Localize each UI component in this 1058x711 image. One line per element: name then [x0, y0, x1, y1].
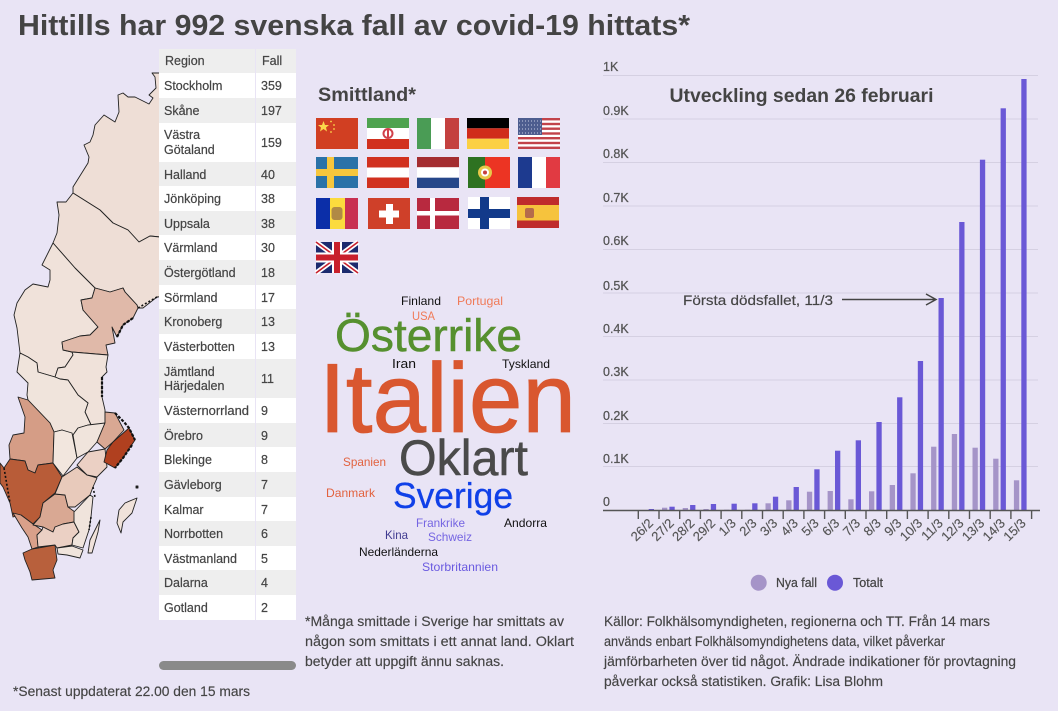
x axis labels: 29/2 [690, 516, 718, 544]
footnote: last updated: *Senast uppdaterat 22.00 den 15 mars [13, 684, 250, 699]
annotation: first death: Första dödsfallet, 11/3 [683, 292, 833, 308]
table: cases per region: 2 [261, 601, 268, 615]
table: cases per region: Jämtland [164, 365, 215, 379]
x axis labels: 12/3 [938, 516, 967, 544]
note: sources: används enbart Folkhälsomyndighetens data, vilket påverkar [604, 634, 945, 649]
table: cases per region: Värmland [164, 241, 218, 255]
table: cases per region: Halland [164, 168, 206, 182]
word cloud: Oklart [399, 430, 528, 486]
word cloud: Tyskland [502, 357, 550, 371]
table: cases per region: 38 [261, 217, 275, 231]
note: sources: påverkar också statistiken. Grafik: Lisa Blohm [604, 674, 883, 689]
note: Smittland explanation: *Många smittade i Sverige har smittats av [305, 614, 564, 629]
x axis labels [628, 516, 1029, 544]
x axis labels: 1/3 [716, 516, 739, 539]
word cloud: Andorra [504, 516, 547, 530]
table: cases per region: 8 [261, 453, 268, 467]
table: cases per region: Västernorrland [164, 404, 249, 418]
x axis labels: 3/3 [757, 516, 780, 539]
word cloud: Spanien [343, 455, 386, 469]
table: cases per region: Sörmland [164, 291, 218, 305]
flag: Andorra [316, 198, 358, 229]
flag: China [316, 118, 358, 149]
flag: Portugal [468, 157, 510, 188]
table: cases per region [159, 49, 296, 620]
table: cases per region: Västmanland [164, 552, 237, 566]
table: cases per region: 13 [261, 315, 275, 329]
table: cases per region: 9 [261, 404, 268, 418]
table: cases per region: Västerbotten [164, 340, 235, 354]
table: cases per region: Västra [164, 128, 200, 142]
x axis labels: 2/3 [736, 516, 760, 539]
table: cases per region: 17 [261, 291, 275, 305]
flag: Netherlands [417, 157, 459, 188]
word cloud: Italien [319, 343, 576, 453]
x axis labels: 15/3 [1000, 516, 1029, 544]
table: cases per region: Norrbotten [164, 527, 223, 541]
legend [751, 575, 884, 591]
table: cases per region: 6 [261, 527, 268, 541]
flag: United Kingdom [316, 242, 358, 273]
table: cases per region: Kalmar [164, 503, 204, 517]
table: cases per region: 13 [261, 340, 275, 354]
table: cases per region: Stockholm [164, 79, 222, 93]
x axis labels: 8/3 [860, 516, 884, 539]
y axis labels [603, 60, 629, 509]
chart heading: Utveckling sedan 26 februari [670, 85, 934, 107]
y axis labels: 0.3K [603, 365, 629, 379]
x axis labels: 11/3 [918, 516, 946, 543]
table: cases per region: Örebro [164, 429, 203, 443]
table: cases per region: Gävleborg [164, 478, 222, 492]
note: Smittland explanation: betyder att uppgift ännu saknas. [305, 654, 504, 669]
table: cases per region: Region [165, 54, 205, 68]
y axis labels: 0 [603, 495, 610, 509]
word cloud: Portugal [457, 294, 503, 308]
x axis labels: 27/2 [648, 516, 677, 544]
annotation: first death [683, 292, 936, 308]
flag: France [518, 157, 560, 188]
word cloud: Frankrike [416, 516, 465, 530]
flag: Italy [417, 118, 459, 149]
table: cases per region: 197 [261, 104, 282, 118]
flag: Iran [367, 118, 409, 149]
table: cases per region: 9 [261, 429, 268, 443]
x axis labels: 5/3 [798, 516, 822, 539]
table: cases per region: 359 [261, 79, 282, 93]
table: cases per region: 18 [261, 266, 275, 280]
map: Swedish regions [0, 73, 170, 580]
table: cases per region: Gotland [164, 601, 208, 615]
table: cases per region: Östergötland [164, 266, 236, 280]
flag: USA [518, 118, 560, 149]
note: Smittland explanation [305, 614, 574, 669]
x axis labels: 13/3 [959, 516, 987, 544]
table: cases per region: 40 [261, 168, 275, 182]
table: cases per region: Härjedalen [164, 379, 225, 393]
word cloud: Finland [401, 294, 441, 308]
x axis labels: 6/3 [819, 516, 842, 539]
table: cases per region: 7 [261, 503, 268, 517]
word cloud: Kina [385, 528, 408, 542]
x axis labels: 9/3 [881, 516, 905, 539]
word cloud: Österrike [335, 310, 522, 361]
y axis labels: 1K [603, 60, 619, 74]
table: cases per region: Jönköping [164, 192, 221, 206]
table: cases per region: 159 [261, 136, 282, 150]
table: cases per region: Uppsala [164, 217, 210, 231]
bar chart: development since 26 February [603, 60, 1040, 544]
scrollbar [159, 661, 296, 670]
legend: Nya fall [776, 576, 817, 590]
table: cases per region: 38 [261, 192, 275, 206]
x axis labels: 7/3 [840, 516, 863, 539]
x axis labels: 10/3 [897, 516, 925, 544]
table: cases per region: 11 [261, 372, 274, 386]
bars: Totalt [649, 79, 1027, 510]
flag: Sweden [316, 157, 358, 188]
word cloud: Nederländerna [359, 545, 438, 559]
y axis labels: 0.1K [603, 452, 629, 466]
note: sources: jämförbarheten över tid något. Ändrade indikationer för provtagning [603, 654, 1016, 669]
flag: Switzerland [368, 198, 410, 229]
y axis labels: 0.5K [603, 279, 629, 293]
note: Smittland explanation: någon som smittats i ett annat land. Oklart [305, 634, 574, 649]
word cloud: Danmark [326, 486, 376, 500]
y axis labels: 0.2K [603, 409, 629, 423]
note: sources: Källor: Folkhälsomyndigheten, regionerna och TT. Från 14 mars [604, 614, 990, 629]
word cloud: Storbritannien [422, 560, 498, 574]
y axis labels: 0.8K [603, 147, 629, 161]
word cloud: Schweiz [428, 530, 472, 544]
table: cases per region: Götaland [164, 143, 215, 157]
y axis labels: 0.4K [603, 322, 629, 336]
note: sources [603, 614, 1016, 689]
heading: Smittland: Smittland* [318, 84, 416, 106]
word cloud [319, 294, 576, 574]
flag: Austria [367, 157, 409, 188]
table: cases per region: 4 [261, 576, 268, 590]
flag: Denmark [417, 198, 459, 229]
table: cases per region: 5 [261, 552, 268, 566]
legend: Totalt [853, 576, 884, 590]
word cloud: USA [412, 309, 435, 323]
x axis labels: 14/3 [980, 516, 1008, 544]
table: cases per region: Fall [262, 54, 282, 68]
table: cases per region: Dalarna [164, 576, 208, 590]
word cloud: Sverige [393, 475, 513, 516]
word cloud: Iran [392, 356, 416, 371]
table: cases per region: Kronoberg [164, 315, 222, 329]
table: cases per region: Blekinge [164, 453, 212, 467]
table: cases per region: 7 [261, 478, 268, 492]
table: cases per region: Skåne [164, 104, 199, 118]
table: cases per region: 30 [261, 241, 275, 255]
flag: Spain [517, 197, 559, 228]
x axis labels: 26/2 [628, 516, 656, 544]
x axis [603, 510, 1040, 519]
y axis labels: 0.6K [603, 234, 629, 248]
flag: Finland [468, 197, 510, 229]
y axis labels: 0.9K [603, 104, 629, 118]
flag: Germany [467, 118, 509, 149]
x axis labels: 4/3 [778, 516, 801, 539]
y axis labels: 0.7K [603, 191, 629, 205]
flags [316, 118, 560, 273]
bars: Nya fall [662, 434, 1019, 510]
title: Hittills har 992 svenska fall av covid-19 hittats* [18, 10, 691, 42]
x axis labels: 28/2 [669, 516, 698, 544]
